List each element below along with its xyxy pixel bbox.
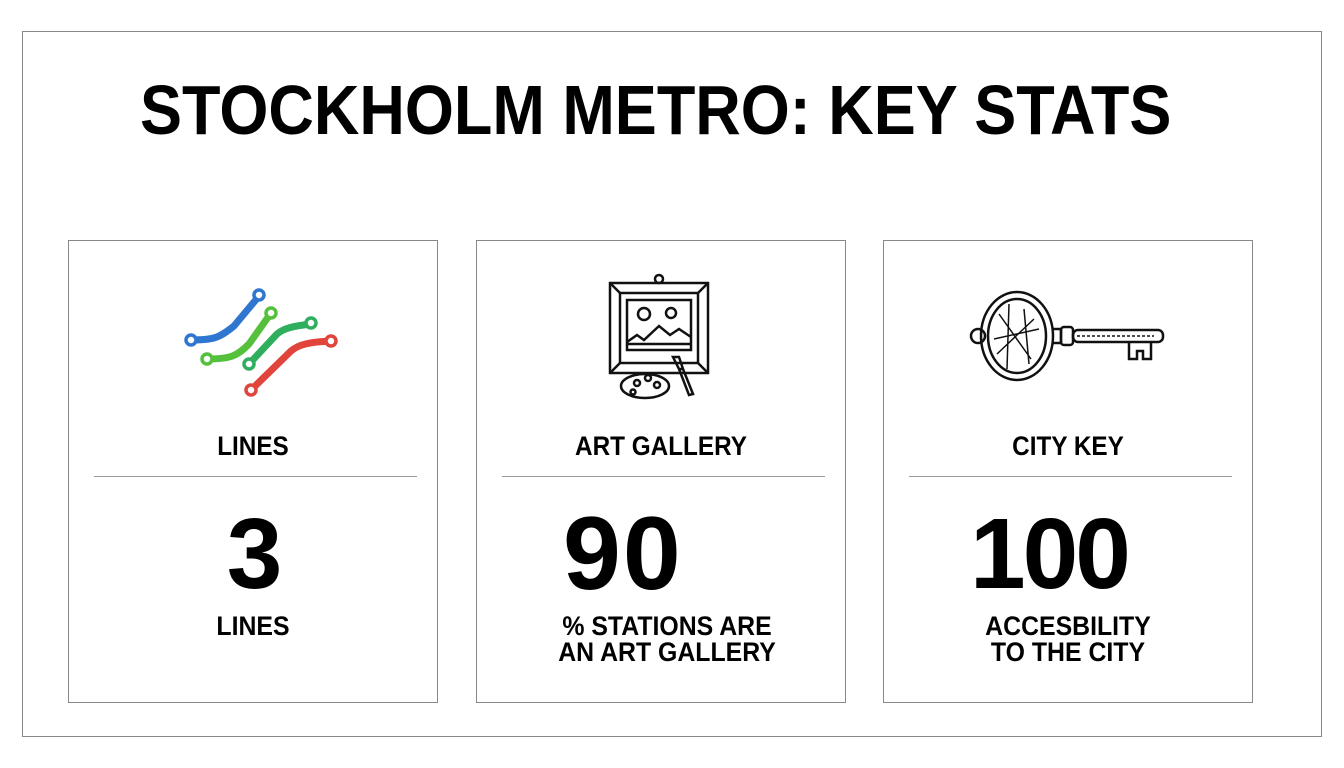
number: 100 — [970, 498, 1128, 610]
panel: lines — [68, 240, 438, 703]
label: LINES — [217, 431, 289, 461]
number: 90 — [563, 496, 683, 612]
subtext: % STATIONS ARE — [562, 611, 772, 641]
subtext — [985, 611, 1151, 667]
subtext — [558, 611, 776, 667]
icon: metro lines — [184, 288, 338, 397]
panel: art gallery — [476, 240, 846, 703]
title: STOCKHOLM METRO: KEY STATS — [140, 71, 1171, 149]
icon: key with map — [970, 290, 1164, 382]
label: CITY KEY — [1012, 431, 1124, 461]
subtext: LINES — [216, 611, 290, 641]
subtext: AN ART GALLERY — [558, 637, 776, 667]
icon: framed picture — [608, 274, 710, 400]
number: 3 — [227, 498, 279, 610]
label: ART GALLERY — [575, 431, 747, 461]
subtext: ACCESBILITY — [985, 611, 1151, 641]
subtext: TO THE CITY — [991, 637, 1145, 667]
panel: city key — [883, 240, 1253, 703]
